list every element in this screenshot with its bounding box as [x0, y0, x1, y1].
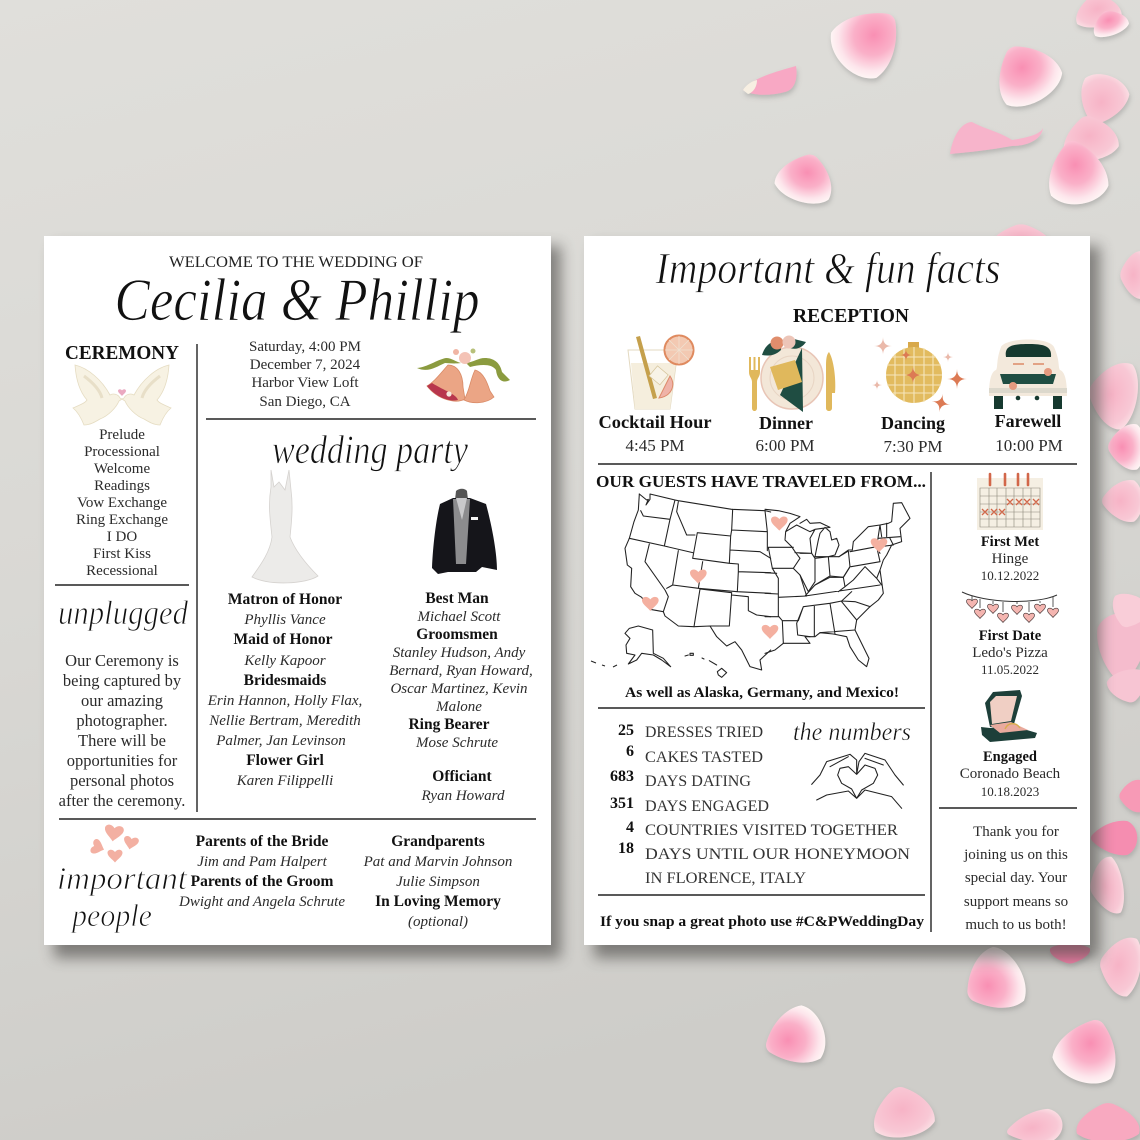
wedding party left column: Nellie Bertram, Meredith: [208, 713, 361, 729]
the numbers stats: [610, 722, 910, 887]
title: important and fun facts: Important & fun facts: [655, 244, 1000, 293]
wedding party left column: Bridesmaids: [244, 672, 326, 689]
icon: getaway car: [989, 339, 1067, 409]
the numbers stats: DRESSES TRIED: [645, 724, 763, 741]
icon: calendar: [977, 474, 1043, 530]
ceremony order list: Readings: [94, 478, 150, 494]
grandparents list: (optional): [408, 914, 468, 930]
icon: disco ball: [872, 337, 967, 414]
wedding party right column: Best Man: [425, 590, 489, 607]
wedding party left column: Karen Filippelli: [236, 773, 333, 789]
ceremony order list: Welcome: [94, 461, 150, 477]
first date: 11.05.2022: [981, 662, 1039, 677]
the numbers stats: 25: [618, 722, 634, 739]
scattered pink petals: [743, 0, 1140, 1140]
parents list: Parents of the Groom: [191, 873, 333, 890]
dividers right: [598, 464, 1077, 932]
panel: important and fun facts: [584, 236, 1090, 945]
icon: suit: [432, 489, 497, 574]
unplugged text: There will be: [78, 731, 166, 750]
ceremony order list: Prelude: [99, 427, 145, 443]
aleutian islands: [591, 661, 617, 667]
ceremony order list: I DO: [107, 529, 137, 545]
heading: ceremony: CEREMONY: [65, 342, 180, 364]
heading: welcome line: WELCOME TO THE WEDDING OF: [169, 254, 423, 271]
reception schedule labels: 4:45 PM: [625, 436, 685, 455]
unplugged text: personal photos: [70, 771, 174, 790]
wedding party left column: Flower Girl: [246, 752, 325, 769]
first date: First Date: [979, 628, 1042, 644]
reception schedule labels: Dinner: [759, 413, 813, 433]
first met: [981, 534, 1039, 583]
heading: important people: [57, 860, 188, 933]
first met: Hinge: [992, 551, 1029, 567]
grandparents list: [363, 833, 512, 930]
wedding party left column: Matron of Honor: [228, 591, 342, 608]
heading: important people: people: [70, 897, 152, 933]
unplugged text: Our Ceremony is: [65, 651, 179, 670]
wedding party left column: [207, 591, 362, 789]
the numbers stats: 6: [626, 743, 634, 760]
the numbers stats: 18: [618, 840, 634, 857]
icon: ring box: [981, 690, 1037, 742]
reception schedule labels: Dancing: [881, 413, 945, 433]
the numbers stats: 683: [610, 768, 634, 785]
engaged: Coronado Beach: [960, 766, 1061, 782]
title: couple names: Cecilia & Phillip: [114, 267, 480, 333]
thank you note: Thank you for: [973, 824, 1059, 840]
wedding party right column: Mose Schrute: [415, 735, 498, 751]
the numbers stats: 4: [626, 819, 634, 836]
unplugged text: opportunities for: [67, 751, 178, 770]
first met: First Met: [981, 534, 1039, 550]
wedding party left column: Erin Hannon, Holly Flax,: [207, 693, 362, 709]
icon: heart hands: [812, 753, 903, 808]
wedding party left column: Palmer, Jan Levinson: [215, 733, 346, 749]
reception schedule labels: Cocktail Hour: [598, 412, 712, 432]
icon: wedding dress: [252, 470, 318, 583]
the numbers stats: DAYS ENGAGED: [645, 798, 769, 815]
icon: wedding bells: [417, 348, 510, 403]
first met: 10.12.2022: [981, 568, 1039, 583]
ceremony order list: [76, 427, 168, 579]
event details: [249, 339, 361, 410]
parents list: Dwight and Angela Schrute: [178, 894, 345, 910]
heading: unplugged: unplugged: [58, 595, 189, 632]
snap photo hashtag: If you snap a great photo use #C&PWeddingDay: [600, 914, 925, 930]
icon: hearts: [90, 824, 139, 862]
the numbers stats: DAYS DATING: [645, 773, 751, 790]
unplugged text: our amazing: [81, 691, 163, 710]
map east half: [762, 503, 910, 667]
thank you note: much to us both!: [965, 917, 1067, 933]
wedding party right column: Ring Bearer: [408, 716, 490, 733]
wedding party right column: Officiant: [432, 768, 493, 785]
map west half: [625, 494, 771, 677]
ceremony order list: Processional: [84, 444, 160, 460]
ceremony order list: First Kiss: [93, 546, 151, 562]
parents list: Jim and Pam Halpert: [197, 854, 328, 870]
grandparents list: In Loving Memory: [375, 893, 501, 910]
engaged: Engaged: [983, 749, 1037, 765]
wedding party right column: Stanley Hudson, Andy: [393, 645, 526, 661]
parents list: Parents of the Bride: [196, 833, 328, 850]
icon: doves: [73, 365, 171, 425]
wedding party left column: Maid of Honor: [233, 631, 333, 648]
wedding party right column: Ryan Howard: [421, 788, 505, 804]
unplugged text: being captured by: [63, 671, 182, 690]
wedding party right column: [389, 590, 533, 804]
engaged: [960, 749, 1061, 799]
chart: us map with hearts: [591, 494, 910, 677]
reception schedule labels: 10:00 PM: [995, 436, 1063, 455]
unplugged text: after the ceremony.: [59, 791, 185, 810]
parents list: [178, 833, 345, 910]
thank you note: joining us on this: [963, 847, 1068, 863]
wedding party left column: Kelly Kapoor: [243, 653, 326, 669]
event details: San Diego, CA: [259, 394, 351, 410]
the numbers stats: IN FLORENCE, ITALY: [645, 870, 806, 887]
unplugged text: [59, 651, 185, 810]
icon: heart bunting: [962, 592, 1058, 622]
panel: welcome program: [44, 236, 551, 945]
heading: reception: RECEPTION: [793, 305, 910, 327]
the numbers stats: COUNTRIES VISITED TOGETHER: [645, 822, 898, 839]
event details: Harbor View Loft: [251, 375, 359, 391]
engaged: 10.18.2023: [981, 784, 1039, 799]
heading: the numbers: the numbers: [793, 719, 911, 746]
heading: important people: important: [57, 860, 188, 896]
wedding party right column: Bernard, Ryan Howard,: [389, 663, 533, 679]
heading: guests travel: OUR GUESTS HAVE TRAVELED FROM...: [596, 472, 926, 491]
dividers left: [55, 344, 536, 819]
wedding party right column: Michael Scott: [417, 609, 501, 625]
grandparents list: Julie Simpson: [396, 874, 480, 890]
reception schedule labels: Farewell: [995, 411, 1061, 431]
icon: cocktail: [628, 336, 694, 409]
reception schedule labels: 6:00 PM: [755, 436, 815, 455]
wedding party right column: Malone: [435, 699, 482, 715]
unplugged text: photographer.: [76, 711, 168, 730]
panel shadows: [54, 246, 1100, 958]
grandparents list: Pat and Marvin Johnson: [363, 854, 512, 870]
wedding party right column: Groomsmen: [416, 626, 498, 643]
first date: [972, 628, 1048, 677]
wedding party left column: Phyllis Vance: [243, 612, 326, 628]
grandparents list: Grandparents: [391, 833, 485, 850]
ceremony order list: Vow Exchange: [77, 495, 167, 511]
wedding party right column: Oscar Martinez, Kevin: [390, 681, 528, 697]
thank you note: special day. Your: [965, 870, 1067, 886]
thank you note: support means so: [964, 894, 1068, 910]
the numbers stats: CAKES TASTED: [645, 749, 763, 766]
thank you note: [963, 824, 1068, 933]
event details: December 7, 2024: [250, 357, 361, 373]
reception schedule labels: 7:30 PM: [883, 437, 943, 456]
ceremony order list: Ring Exchange: [76, 512, 168, 528]
ceremony order list: Recessional: [86, 563, 158, 579]
icon: dinner plate: [749, 336, 835, 412]
the numbers stats: DAYS UNTIL OUR HONEYMOON: [645, 846, 910, 863]
reception schedule labels: [598, 411, 1063, 456]
event details: Saturday, 4:00 PM: [249, 339, 361, 355]
heading: wedding party: wedding party: [272, 427, 468, 472]
first date: Ledo's Pizza: [972, 645, 1048, 661]
the numbers stats: 351: [610, 795, 634, 812]
map caption: As well as Alaska, Germany, and Mexico!: [625, 685, 899, 701]
